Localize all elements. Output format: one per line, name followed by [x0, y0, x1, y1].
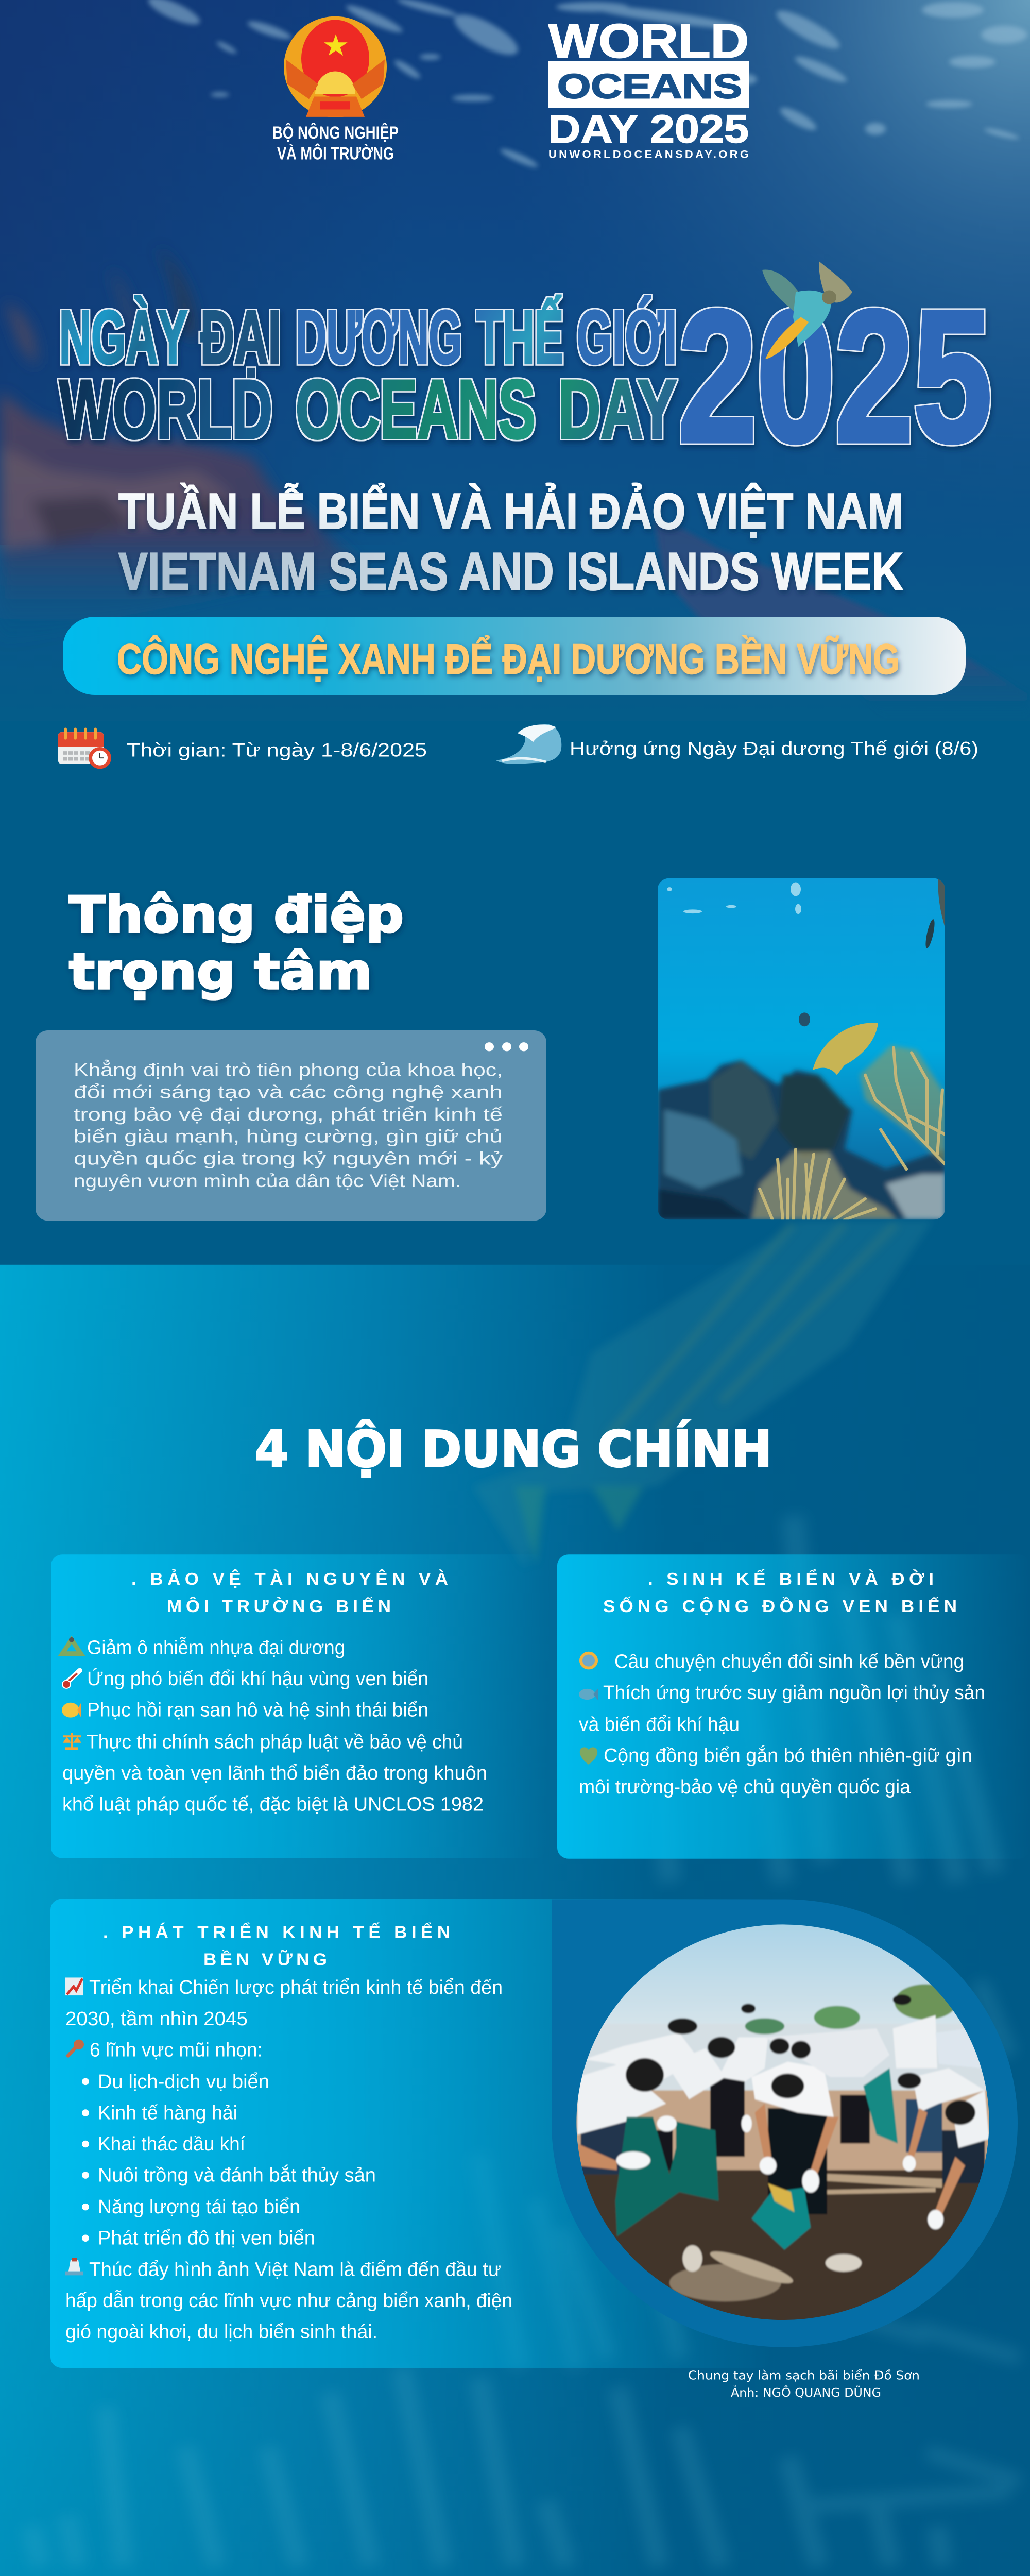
key message text: Khẳng định vai trò tiên phong của khoa học, — [74, 1059, 503, 1080]
body text: Năng lượng tái tạo biển — [98, 2196, 300, 2218]
body text: Thúc đẩy hình ảnh Việt Nam là điểm đến đầu tư — [89, 2258, 501, 2280]
body text: gió ngoài khơi, du lịch biển sinh thái. — [65, 2320, 377, 2343]
hero: manta ray at right — [654, 520, 1027, 718]
icon: livelihood wheel — [581, 1653, 596, 1668]
icon: chart — [65, 1977, 83, 1995]
key message text: nguyên vươn mình của dân tộc Việt Nam. — [74, 1170, 461, 1191]
title: Ngày Đại dương Thế giới / World Oceans Day 2025: GIỚI — [577, 295, 677, 379]
logo: ministry emblem: VÀ MÔI TRƯỜNG — [277, 143, 394, 163]
icon: ocean wave — [496, 724, 561, 764]
info: response — [496, 724, 978, 764]
panel: key message — [36, 1030, 546, 1221]
card heading: . PHÁT TRIỂN KINH TẾ BIỂN — [103, 1922, 450, 1942]
card heading — [103, 1922, 450, 1969]
body text: môi trường-bảo vệ chủ quyền quốc gia — [579, 1775, 911, 1798]
body text: Giảm ô nhiễm nhựa đại dương — [87, 1636, 345, 1658]
icon: key — [67, 2040, 84, 2057]
card heading: . SINH KẾ BIỂN VÀ ĐỜI — [648, 1569, 934, 1589]
body text: Du lịch-dịch vụ biển — [98, 2071, 269, 2093]
heading: key message: trọng tâm — [69, 943, 372, 1001]
photo: beach clean-up — [574, 1922, 991, 2325]
background: ghost fish — [473, 1221, 933, 1568]
logo: World Oceans Day 2025: OCEANS — [557, 68, 742, 106]
logo: ministry emblem — [272, 16, 399, 163]
panel: marine resources and environment — [51, 1554, 546, 1858]
key message text: trong bảo vệ đại dương, phát triển kinh tế — [74, 1104, 503, 1125]
logo: World Oceans Day 2025: WORLD — [548, 14, 749, 68]
card heading — [603, 1569, 957, 1616]
heading: 4 main topics: 4 NỘI DUNG CHÍNH — [255, 1420, 772, 1479]
logo: World Oceans Day 2025 — [548, 14, 749, 161]
key message text: quyền quốc gia trong kỷ nguyên mới - kỷ — [74, 1148, 503, 1168]
body text: Thực thi chính sách pháp luật về bảo vệ chủ — [87, 1731, 463, 1753]
body text: Ứng phó biến đổi khí hậu vùng ven biển — [87, 1668, 428, 1690]
body text: Phục hồi rạn san hô và hệ sinh thái biển — [87, 1699, 428, 1721]
logo: World Oceans Day 2025: UNWORLDOCEANSDAY.ORG — [548, 148, 749, 161]
icon: ship — [65, 2258, 83, 2275]
body text — [62, 1636, 487, 1815]
subtitle: Vietnam seas and islands week — [118, 483, 903, 602]
body text: Triển khai Chiến lược phát triển kinh tế biển đến — [89, 1976, 503, 1998]
body text: 6 lĩnh vực mũi nhọn: — [90, 2039, 263, 2061]
body text: và biến đổi khí hậu — [579, 1713, 740, 1735]
photo caption: Chung tay làm sạch bãi biển Đồ Sơn — [688, 2368, 920, 2382]
card heading: SỐNG CỘNG ĐỒNG VEN BIỂN — [603, 1596, 957, 1616]
hero: coral reef at left — [0, 246, 355, 644]
key message text: biển giàu mạnh, hùng cường, gìn giữ chủ — [74, 1126, 503, 1146]
banner: theme — [63, 617, 966, 695]
photo caption: Ảnh: NGÔ QUANG DŨNG — [731, 2385, 881, 2400]
icon: scales — [63, 1733, 81, 1750]
info: time: Thời gian: Từ ngày 1-8/6/2025 — [127, 739, 427, 761]
title: Ngày Đại dương Thế giới / World Oceans Day 2025 — [59, 271, 992, 481]
hero: underwater background — [0, 0, 1030, 721]
title: Ngày Đại dương Thế giới / World Oceans Day 2025: THẾ — [476, 295, 563, 379]
title: Ngày Đại dương Thế giới / World Oceans Day 2025: ĐẠI — [200, 295, 281, 379]
body text: Phát triển đô thị ven biển — [98, 2227, 315, 2249]
body text — [579, 1650, 985, 1798]
panel: sustainable marine economy — [50, 1899, 771, 2368]
body text: Kinh tế hàng hải — [98, 2102, 237, 2124]
body text: Cộng đồng biển gắn bó thiên nhiên-giữ gìn — [604, 1744, 972, 1767]
heading: key message: Thông điệp — [69, 886, 404, 944]
icon: green heart — [580, 1747, 597, 1765]
shape: blue photo frame — [552, 1900, 1018, 2347]
info: time — [58, 729, 427, 769]
icon: calendar and clock — [58, 729, 111, 769]
card heading: . BẢO VỆ TÀI NGUYÊN VÀ — [131, 1569, 448, 1589]
body text — [65, 1976, 512, 2343]
card heading — [131, 1569, 448, 1616]
title: Ngày Đại dương Thế giới / World Oceans Day 2025: OCEANS — [296, 363, 536, 455]
logo: ministry emblem: BỘ NÔNG NGHIỆP — [272, 123, 399, 143]
panel: marine livelihoods and coastal community — [557, 1554, 1030, 1859]
body text: 2030, tầm nhìn 2045 — [65, 2007, 248, 2030]
body text: khổ luật pháp quốc tế, đặc biệt là UNCLOS 1982 — [62, 1793, 484, 1815]
photo caption — [688, 2368, 920, 2400]
title: Ngày Đại dương Thế giới / World Oceans Day 2025: WORLD — [59, 363, 272, 455]
icon: sea turtle — [762, 261, 852, 359]
body text: Nuôi trồng và đánh bắt thủy sản — [98, 2164, 376, 2186]
heading: key message — [69, 886, 404, 1001]
coral mass — [658, 1045, 945, 1219]
card heading: BỀN VỮNG — [203, 1949, 327, 1969]
background: ghost coral — [31, 1516, 1020, 2566]
sea fan corals — [760, 1048, 945, 1219]
body text: hấp dẫn trong các lĩnh vực như cảng biển xanh, điện — [65, 2290, 512, 2312]
body text: quyền và toàn vẹn lãnh thổ biển đảo trong khuôn — [62, 1762, 487, 1784]
body text: Câu chuyện chuyển đổi sinh kế bền vững — [614, 1650, 964, 1672]
key message text — [74, 1059, 503, 1191]
icon: tropical fish — [62, 1702, 81, 1718]
photo: coral reef and fish — [658, 878, 945, 1219]
icon: recycling — [62, 1637, 81, 1654]
info: response: Hưởng ứng Ngày Đại dương Thế giới (8/6) — [570, 738, 978, 759]
body text: Thích ứng trước suy giảm nguồn lợi thủy sản — [603, 1682, 985, 1704]
dots — [485, 1042, 528, 1051]
bullets — [82, 2078, 89, 2242]
title: Ngày Đại dương Thế giới / World Oceans Day 2025: DAY — [558, 363, 677, 455]
body text: Khai thác dầu khí — [98, 2133, 245, 2155]
logo: World Oceans Day 2025: DAY 2025 — [548, 107, 749, 151]
icon: fish — [579, 1689, 598, 1700]
key message text: đổi mới sáng tạo và các công nghệ xanh — [74, 1081, 503, 1103]
icon: thermometer — [62, 1670, 80, 1688]
title: Ngày Đại dương Thế giới / World Oceans Day 2025: NGÀY — [59, 295, 187, 379]
card heading: MÔI TRƯỜNG BIỂN — [167, 1596, 391, 1616]
title: Ngày Đại dương Thế giới / World Oceans Day 2025: DƯƠNG — [296, 295, 462, 379]
